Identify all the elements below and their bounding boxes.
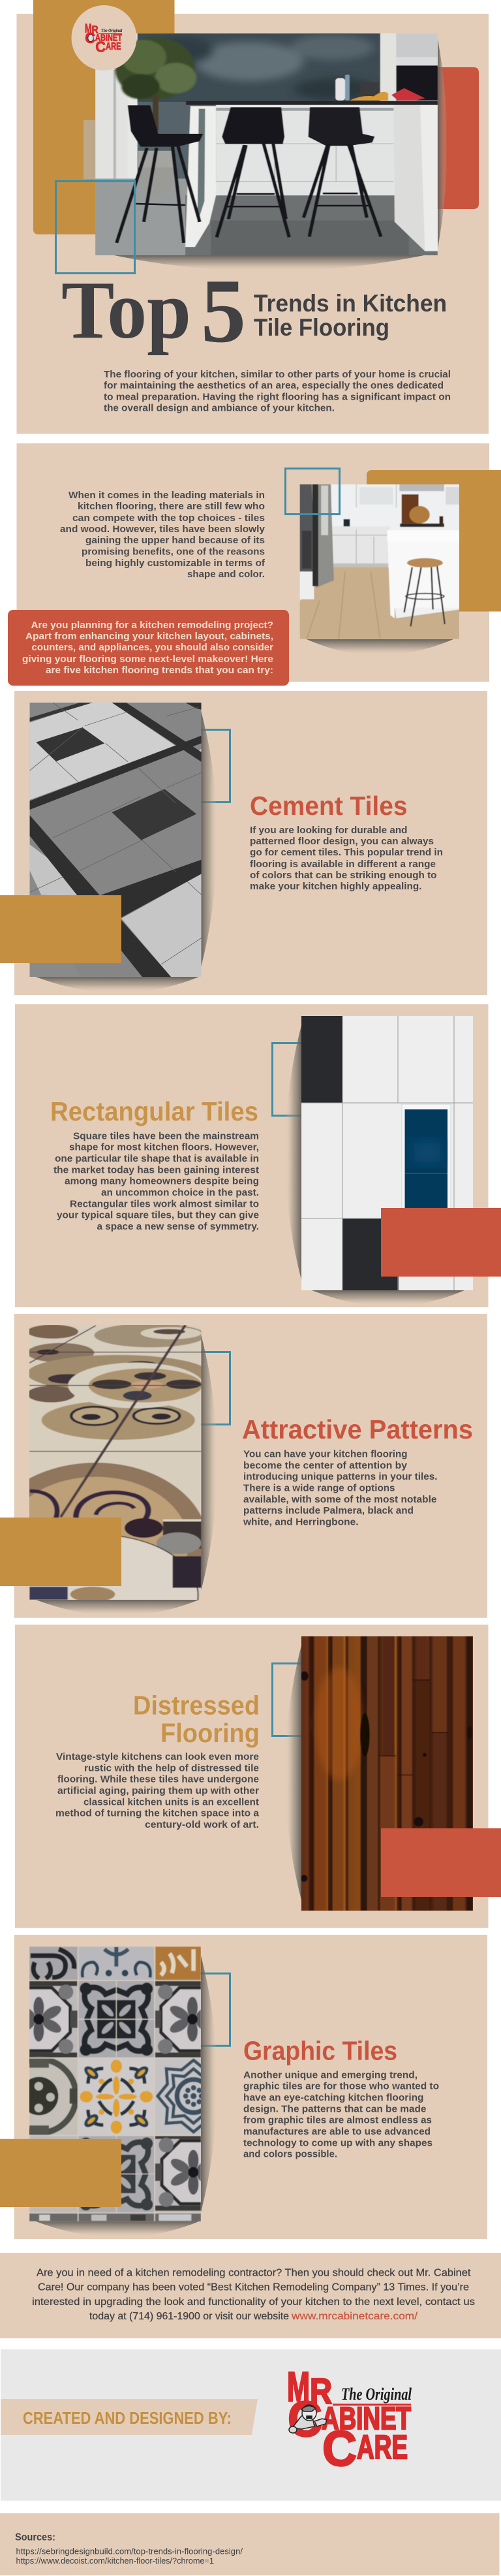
logo: ABINET [322,2402,411,2436]
text block: If you are looking for durable and [250,825,407,836]
intro text: for maintaining the aesthetics of an area, especially the ones dedicated [104,380,444,391]
gold block [0,2139,121,2207]
logo: C [322,2421,357,2477]
title: Tile Flooring [254,314,389,341]
title: Top [61,265,191,356]
text block: and wood. However, tiles have been slowly [60,524,266,535]
text block: available, with some of the most notable [243,1494,437,1505]
text block: shape and color. [187,569,265,580]
text block: kitchen flooring, there are still few who [78,501,265,512]
text block: among many homeowners despite being [65,1176,259,1187]
red block [381,1208,501,1277]
title [61,261,447,362]
text block: There is a wide range of options [243,1483,395,1494]
panel: materials intro [8,443,501,686]
logo badge: R [92,24,99,36]
photo: graphic tiles [29,1947,201,2221]
text block: artificial aging, pairing them up with other [57,1785,259,1796]
teal frame [189,730,230,802]
panel: call to action: today at (714) 961-1900 or visit our website [89,2311,289,2322]
intro text: the overall design and ambiance of your kitchen. [104,402,335,414]
logo badge: ABINET [95,33,122,44]
red block [381,1828,501,1897]
row 1 [29,1947,78,1980]
heading: Rectangular Tiles [50,1096,258,1126]
logo badge: C [95,38,106,55]
text block: Rectangular tiles work almost similar to [70,1198,259,1209]
text block: become the center of attention by [243,1460,408,1471]
logo [287,2363,412,2477]
text block [60,490,266,580]
text block [243,1449,437,1528]
text block: of colors that can be striking enough to [250,870,437,881]
text block: flooring. While these tiles have undergone [57,1774,259,1785]
text block: have an eye-catching kitchen flooring [243,2092,424,2103]
panel: created and designed by [1,2349,501,2501]
text block: can compete with the top choices - tiles [72,513,265,524]
text block: manufactures are able to use advanced [243,2126,431,2137]
panel: hero [17,0,489,434]
panel: distressed flooring [15,1625,501,1928]
text block: Vintage-style kitchens can look even more [56,1751,259,1762]
callout: red box: counters, and appliances, you should also consider [31,642,273,653]
panel: sources: https://sebringdesignbuild.com/top-trends-in-flooring-design/ [16,2547,243,2556]
logo badge [72,5,137,71]
panel: sources: Sources: [15,2532,55,2543]
text block: go for cement tiles. This popular trend in [250,847,443,858]
text block: from graphic tiles are almost endless as [243,2115,432,2126]
text block: and colors possible. [243,2149,337,2160]
text block: being highly customizable in terms of [85,558,266,569]
text block [250,825,443,892]
text block: Another unique and emerging trend, [243,2069,418,2080]
text block: a space a new sense of symmetry. [97,1221,259,1232]
text block: graphic tiles are for those who wanted to [243,2081,439,2092]
photo: kitchen with bar stools [95,33,438,257]
row 3 right blue star [155,2058,201,2135]
text block: patterned floor design, you can always [250,836,434,847]
icon: cabinet man mascot [289,2405,327,2433]
bar stools [117,106,381,243]
heading: Flooring [160,1718,260,1748]
text block: gaining the upper hand because of its [85,535,265,546]
teal frame [286,469,339,515]
row 4 [29,2136,78,2213]
text block [243,2069,439,2160]
panel: call to action: www.mrcabinetcare.com/ [291,2311,418,2322]
photo: rectangular wall tiles [301,1016,473,1290]
heading: Distressed [133,1691,260,1721]
panel: call to action: Are you in need of a kitchen remodeling contractor? Then you should check out Mr. Cabinet [37,2268,471,2279]
heading: Graphic Tiles [243,2036,397,2066]
panel: rectangular tiles [15,1004,501,1307]
text block: one particular tile shape that is available in [55,1153,259,1164]
heading [133,1691,260,1748]
text block: rustic with the help of distressed tile [84,1762,259,1773]
logo badge: The Original [101,27,123,33]
text block: an uncommon choice in the past. [101,1187,259,1198]
text block: method of turning the kitchen space into a [55,1808,260,1819]
teal frame [56,182,134,273]
panel: graphic tiles [0,1935,487,2239]
photo: white kitchen [299,484,459,639]
text block: classical kitchen units is an excellent [84,1796,259,1807]
logo: R [310,2371,332,2411]
logo badge: C [85,29,95,46]
text block: make your kitchen highly appealing. [250,881,421,892]
logo: The Original [341,2385,412,2404]
teal frame [273,1664,312,1736]
banner: CREATED AND DESIGNED BY: [23,2408,232,2428]
text block: You can have your kitchen flooring [243,1449,407,1460]
text block: flooring is available in different a range [250,859,436,870]
text block: When it comes in the leading materials in [68,490,265,501]
row 3 centre orange cross [78,2058,155,2135]
panel: attractive patterns [0,1314,487,1618]
logo badge: M [85,22,92,36]
text block: introducing unique patterns in your tiles. [243,1471,437,1482]
panel: call to action: Care! Our company has been voted “Best Kitchen Remodeling Company” 13 Times. If you’re [38,2282,469,2293]
panel: cement tiles [0,691,487,995]
panel: sources: https://www.decoist.com/kitchen-floor-tiles/?chrome=1 [16,2556,214,2566]
teal frame [189,1352,230,1425]
photo: patterned tile floor [29,1325,201,1600]
gold block [367,470,501,611]
text block: century-old work of art. [145,1819,259,1830]
logo: M [287,2363,310,2410]
callout: red box: Apart from enhancing your kitchen layout, cabinets, [25,631,273,642]
logo: C [288,2392,322,2447]
heading: Attractive Patterns [242,1414,473,1444]
teal frame [273,1043,312,1115]
logo: ARE [357,2428,408,2466]
text block: white, and Herringbone. [243,1517,359,1528]
banner [1,2399,258,2435]
text block [53,1130,259,1232]
text block: shape for most kitchen floors. However, [69,1142,259,1153]
red block [391,67,479,209]
callout: red box: Are you planning for a kitchen remodeling project? [31,620,273,631]
text block [55,1751,260,1830]
row 3 left [29,2058,78,2135]
photo: wood planks [300,1634,474,1913]
row 5 [29,2213,201,2221]
intro text: to meal preparation. Having the right flooring has a significant impact on [104,391,451,402]
heading: Cement Tiles [250,791,407,821]
text block: design. The patterns that can be made [243,2103,427,2114]
text block: the market today has been gaining interest [53,1164,259,1175]
callout: red box: are five kitchen flooring trends that you can try: [46,665,273,676]
text block: technology to come up with any shapes [243,2137,433,2148]
text block: patterns include Palmera, black and [243,1505,414,1516]
text block: Square tiles have been the mainstream [73,1130,259,1141]
intro text: The flooring of your kitchen, similar to other parts of your home is crucial [104,369,451,380]
logo badge: ARE [106,41,121,52]
title: 5 [201,261,246,362]
callout: red box: giving your flooring some next-level makeover! Here [22,654,273,665]
panel: sources [0,2513,500,2575]
callout: red box [8,610,289,686]
grout [29,1947,201,2221]
panel: call to action: interested in upgrading the look and functionality of your kitchen to the next level, contact us [32,2297,475,2308]
intro text [104,369,451,414]
gold block [0,1518,121,1586]
gold block [0,895,121,963]
gold block [33,0,175,234]
text block: your typical square tiles, but they can give [57,1210,259,1221]
photo: cement tile floor [30,703,202,977]
title: Trends in Kitchen [254,290,447,317]
teal frame [189,1973,230,2046]
text block: promising benefits, one of the reasons [82,546,265,558]
row 2 [29,1980,78,2058]
panel: call to action [0,2253,501,2338]
